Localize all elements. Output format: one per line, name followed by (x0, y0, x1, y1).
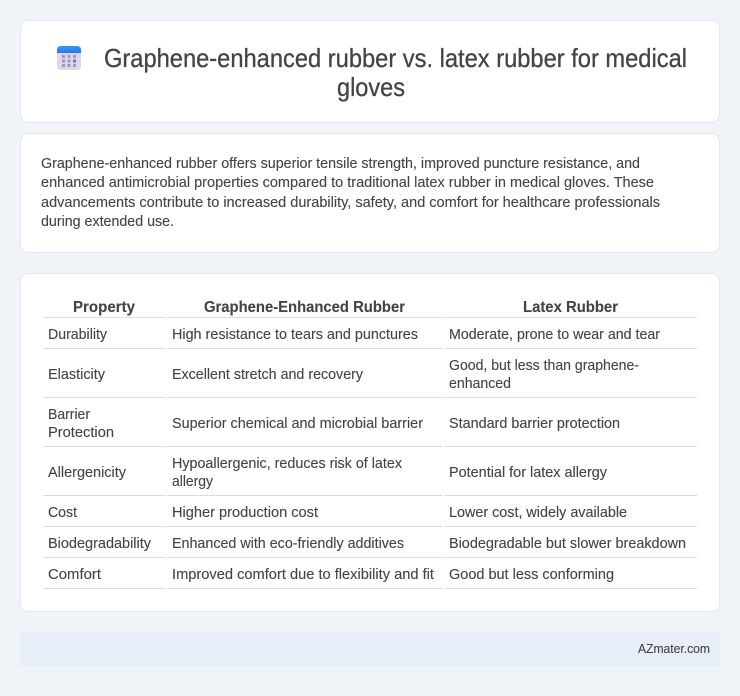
summary text: enhanced antimicrobial properties compared to traditional latex rubber in medical gloves. These (41, 175, 654, 191)
row: allergenicity: Potential for latex allergy (449, 465, 608, 481)
row: comfort: Comfort (48, 567, 101, 583)
row: barrier protection: Protection (48, 425, 114, 441)
title (104, 45, 687, 102)
footer (20, 632, 720, 666)
row: durability: High resistance to tears and punctures (172, 327, 418, 343)
row: cost: Higher production cost (172, 505, 318, 521)
table header: Property (73, 299, 135, 316)
row: elasticity: Good, but less than graphene- (449, 358, 639, 374)
row: allergenicity: Allergenicity (48, 465, 127, 481)
table header (73, 299, 618, 316)
panel: title card (20, 20, 720, 122)
row: biodegradability: Biodegradable but slower breakdown (449, 536, 686, 552)
row: cost (48, 505, 627, 521)
row: biodegradability (48, 536, 686, 552)
row: durability: Durability (48, 327, 108, 343)
row: durability (48, 327, 660, 343)
row: biodegradability: Enhanced with eco-friendly additives (172, 536, 404, 552)
panel: summary card (20, 134, 720, 252)
table header: Graphene-Enhanced Rubber (204, 299, 405, 316)
table header: Latex Rubber (523, 299, 618, 316)
row: barrier protection (48, 407, 620, 441)
row: elasticity: Elasticity (48, 367, 106, 383)
row: elasticity: enhanced (449, 376, 511, 392)
row: cost: Cost (48, 505, 77, 521)
title: gloves (337, 74, 405, 102)
row: comfort: Good but less conforming (449, 567, 614, 583)
row: comfort (48, 567, 614, 583)
title: Graphene-enhanced rubber vs. latex rubber for medical (104, 45, 687, 73)
panel: comparison table (20, 274, 720, 612)
footer: AZmater.com (638, 641, 710, 656)
row: elasticity (48, 358, 639, 392)
summary text: Graphene-enhanced rubber offers superior tensile strength, improved puncture resistance, and (41, 156, 640, 172)
row: allergenicity: allergy (172, 474, 214, 490)
summary text: during extended use. (41, 214, 174, 230)
row: elasticity: Excellent stretch and recovery (172, 367, 364, 383)
row: allergenicity (48, 456, 608, 490)
row: barrier protection: Standard barrier protection (449, 416, 620, 432)
row: cost: Lower cost, widely available (449, 505, 627, 521)
row: barrier protection: Barrier (48, 407, 90, 423)
row: allergenicity: Hypoallergenic, reduces risk of latex (172, 456, 403, 472)
row: comfort: Improved comfort due to flexibility and fit (172, 567, 434, 583)
row: barrier protection: Superior chemical and microbial barrier (172, 416, 423, 432)
icon: calendar (57, 46, 81, 70)
summary text: advancements contribute to increased durability, safety, and comfort for healthcare professionals (41, 195, 660, 211)
summary text (41, 156, 660, 230)
row: durability: Moderate, prone to wear and tear (449, 327, 660, 343)
row: biodegradability: Biodegradability (48, 536, 152, 552)
